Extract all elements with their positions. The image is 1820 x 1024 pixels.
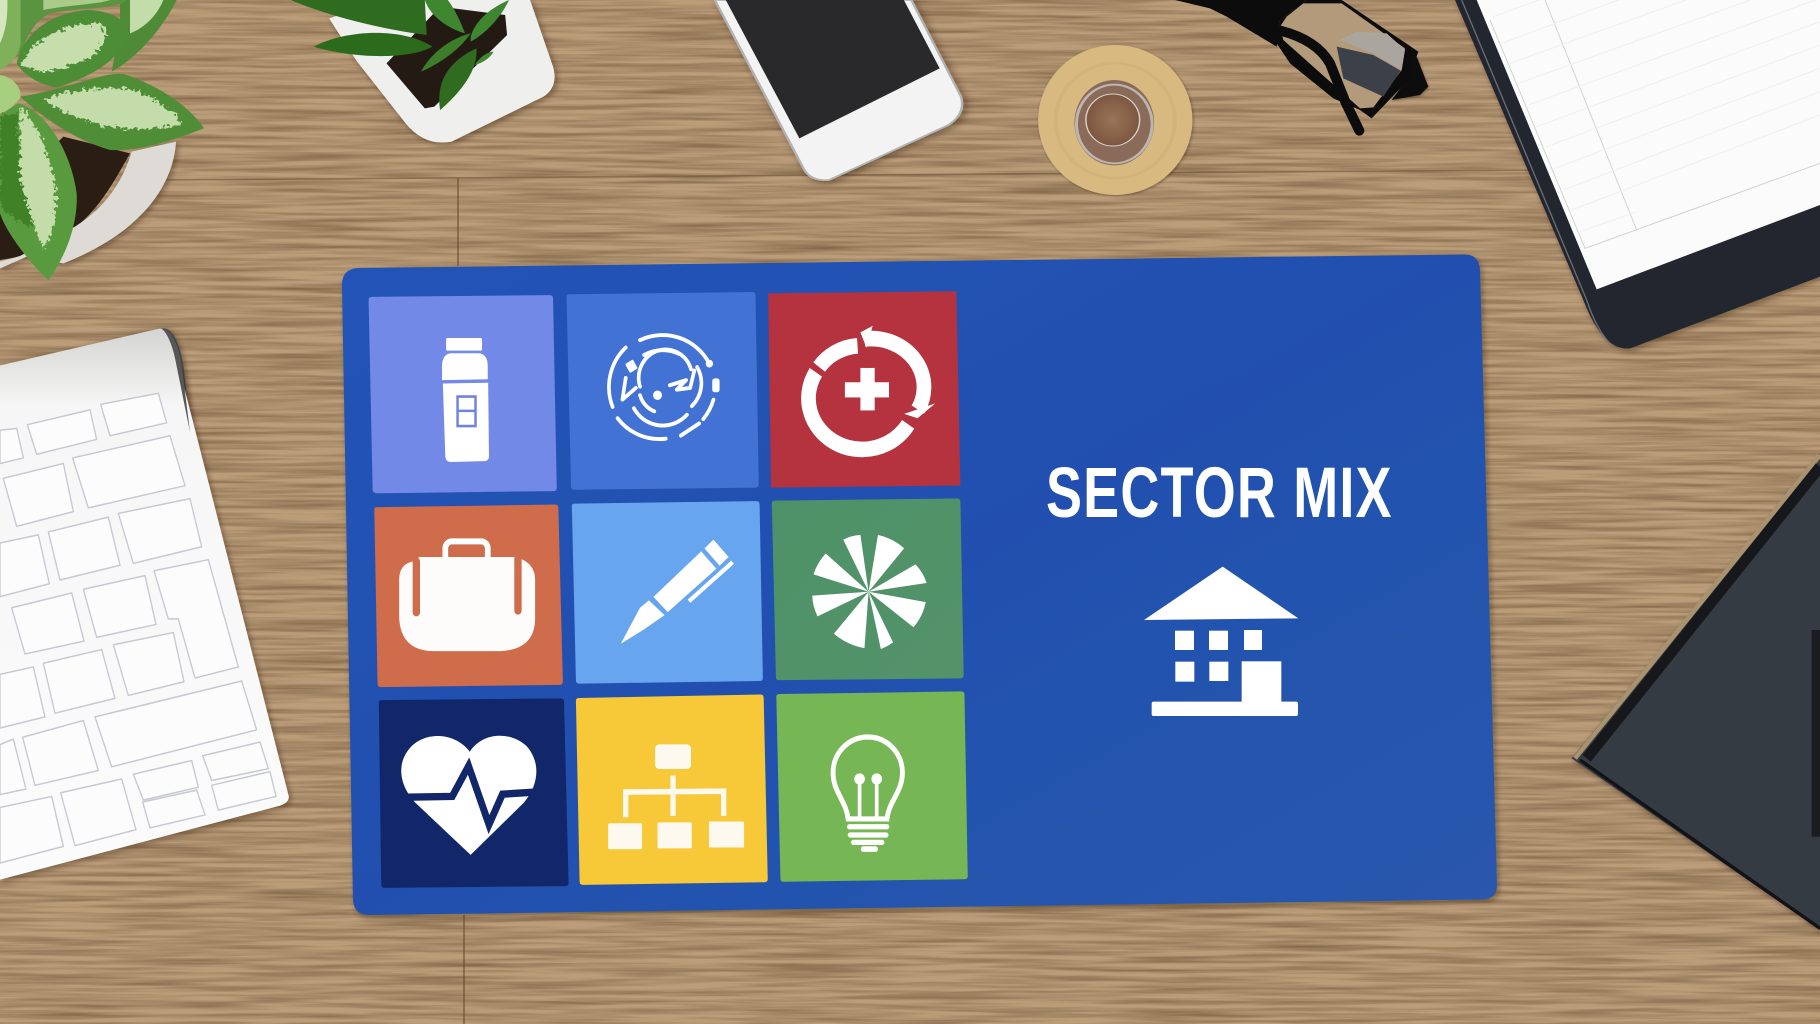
smartphone — [715, 0, 962, 180]
wooden coaster with glass — [1038, 45, 1192, 195]
tile: org chart — [576, 694, 768, 885]
potted variegated plant — [0, 0, 204, 280]
tile: briefcase — [374, 505, 563, 687]
keyboard — [0, 328, 289, 880]
small potted plant in square pot — [291, 0, 555, 143]
tile: pinwheel — [772, 498, 964, 680]
dark hardcover book — [1572, 453, 1820, 930]
title and house icon — [1046, 454, 1392, 716]
tile: bottle — [369, 295, 557, 493]
tile grid — [369, 291, 968, 888]
notebook on dark clipboard — [1455, 0, 1820, 349]
title: sector mix: SECTOR MIX — [1046, 454, 1392, 533]
tile: pen — [572, 501, 763, 684]
tile: medical recycle cross — [768, 291, 960, 488]
blue presentation board — [342, 254, 1497, 915]
tile: maze circuit — [567, 292, 759, 490]
eyeglasses — [1175, 0, 1428, 131]
icon: house — [1144, 567, 1298, 716]
tile: light bulb — [776, 691, 968, 882]
tile: heart pulse — [379, 698, 569, 888]
